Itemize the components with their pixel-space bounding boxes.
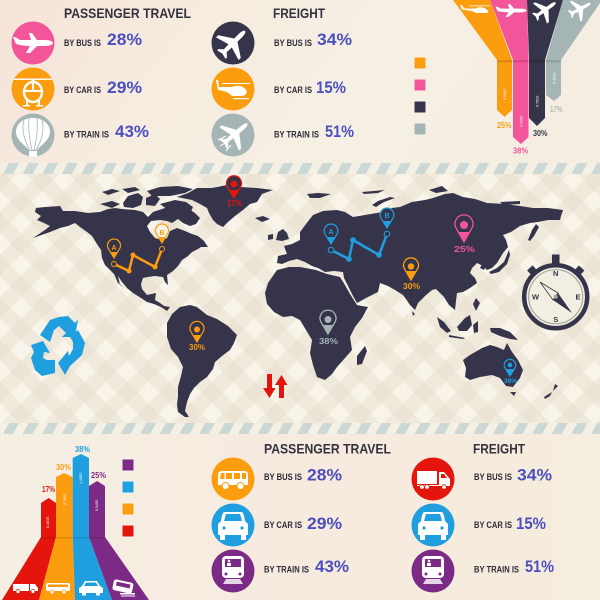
icon: plane in pink circle bbox=[12, 22, 54, 64]
pin: pink 25%: 25% bbox=[454, 244, 476, 254]
legend: top right squares bbox=[414, 57, 426, 135]
pin: orange asia 30% bbox=[403, 258, 420, 291]
bar: gray 17%: 17% bbox=[550, 104, 563, 114]
pin: red 17% bbox=[226, 176, 242, 208]
islands: arctic russia bbox=[307, 186, 520, 207]
pin: orange A: A bbox=[111, 245, 117, 252]
heading: freight: FREIGHT bbox=[273, 5, 325, 21]
pin: orange south america 30% bbox=[189, 321, 205, 352]
continent: africa bbox=[265, 267, 368, 380]
icon: compass: W bbox=[532, 292, 540, 302]
icon: recycle symbol bbox=[31, 316, 85, 376]
island: madagascar bbox=[357, 346, 367, 365]
icon: train on bar bbox=[112, 579, 135, 596]
heading: freight: FREIGHT bbox=[473, 440, 525, 456]
islands: canadian arctic bbox=[100, 186, 193, 214]
pin: orange A bbox=[107, 239, 121, 258]
panel: freight top bbox=[210, 5, 354, 156]
text: by train 43% bbox=[64, 122, 149, 141]
heading: passenger travel: PASSENGER TRAVEL bbox=[264, 440, 391, 456]
background: map plaid panel bbox=[0, 164, 600, 424]
bar: purple 25% bbox=[89, 470, 149, 600]
pin: blue australia 38%: 38% bbox=[504, 379, 518, 385]
islands: uk and ireland bbox=[268, 229, 289, 241]
bar: gray 17% bbox=[546, 0, 600, 114]
icon: train in purple circle bbox=[412, 550, 454, 592]
bar: red 17%: 0.463S bbox=[46, 516, 50, 528]
legend: bottom left squares bbox=[122, 459, 134, 537]
text: by train 43%: 43% bbox=[315, 557, 349, 576]
pin: orange B bbox=[156, 224, 168, 243]
pin: gray africa 38%: 38% bbox=[319, 336, 338, 346]
text: by bus 34%: 34% bbox=[317, 30, 352, 49]
text: by train 43%: 43% bbox=[115, 122, 149, 141]
text: by car 29%: 29% bbox=[307, 514, 342, 533]
world map bbox=[33, 185, 563, 417]
text: by train 43%: BY TRAIN IS bbox=[264, 564, 309, 574]
panel: passenger travel top bbox=[12, 5, 191, 156]
route: eurasia bbox=[328, 231, 390, 262]
text: by bus 34% bbox=[474, 466, 552, 484]
background: bottom band bbox=[0, 423, 600, 600]
bar: dark 30%: 30% bbox=[533, 128, 548, 138]
pin: blue B bbox=[380, 208, 394, 228]
icon: balloon in gray circle bbox=[12, 114, 54, 156]
text: by train 51%: 51% bbox=[325, 122, 354, 141]
icon: plane in dark circle bbox=[210, 20, 256, 66]
pin: blue A bbox=[324, 224, 338, 244]
icon: gray jet on funnel bbox=[565, 0, 596, 24]
text: by bus 34% bbox=[274, 30, 352, 49]
icon: truck in red circle bbox=[412, 458, 454, 500]
route: north america bbox=[112, 246, 164, 274]
icon: bus on bar bbox=[46, 583, 70, 594]
continent: greenland bbox=[177, 185, 273, 227]
icon: jet in gray circle bbox=[212, 112, 257, 156]
icon: plane on funnel bbox=[495, 4, 527, 17]
background: top band bbox=[0, 0, 600, 164]
islands: japan and sakhalin bbox=[480, 224, 539, 274]
bar: orange 25% bbox=[453, 0, 512, 130]
text: by bus 34%: BY BUS IS bbox=[474, 472, 512, 482]
heading: passenger travel: PASSENGER TRAVEL bbox=[64, 5, 191, 21]
bar: orange 30%: 0.762S bbox=[63, 493, 67, 505]
text: by bus 28% bbox=[264, 466, 342, 484]
text: by train 51%: 51% bbox=[525, 557, 554, 576]
islands: southeast asia bbox=[412, 298, 518, 340]
bar: pink 38% bbox=[490, 0, 528, 156]
continent: eurasia bbox=[277, 193, 563, 310]
bar: red 17% bbox=[2, 484, 56, 600]
icon: helicopter in orange circle bbox=[12, 68, 54, 110]
pin: orange south america 30%: 30% bbox=[189, 342, 205, 352]
icon: red up and down arrows bbox=[263, 374, 288, 398]
bar: purple 25%: 25% bbox=[91, 470, 106, 480]
island: iceland bbox=[255, 216, 270, 222]
pin: gray africa 38% bbox=[319, 310, 338, 346]
panel: freight bottom bbox=[412, 440, 554, 592]
pin: orange B: B bbox=[159, 230, 165, 237]
text: by car 15% bbox=[474, 514, 546, 533]
bar: blue 38%: 1.465S bbox=[79, 472, 83, 484]
bar: pink 38%: 38% bbox=[513, 146, 528, 156]
bar: pink 38%: 1.465S bbox=[520, 115, 524, 127]
bar: orange 30%: 30% bbox=[56, 462, 71, 472]
pin: pink 25% bbox=[454, 215, 476, 254]
panel: passenger travel bottom bbox=[212, 440, 391, 592]
bar: orange 30% bbox=[39, 462, 75, 600]
text: by car 29%: BY CAR IS bbox=[64, 85, 101, 95]
text: by car 29% bbox=[264, 514, 342, 533]
bar: dark 30%: 0.762S bbox=[536, 95, 540, 107]
pin: orange asia 30%: 30% bbox=[403, 281, 420, 291]
text: by train 43% bbox=[264, 557, 349, 576]
text: by car 29%: BY CAR IS bbox=[264, 520, 302, 530]
text: by car 15%: BY CAR IS bbox=[474, 520, 512, 530]
icon: side helicopter in orange circle bbox=[212, 68, 254, 110]
text: by bus 28% bbox=[64, 30, 142, 49]
bar: gray 17%: 0.463S bbox=[552, 72, 556, 84]
text: by bus 34%: 34% bbox=[517, 466, 552, 484]
chart: rising bars bottom left bbox=[2, 444, 149, 600]
pin: blue A: A bbox=[328, 229, 334, 236]
icon: compass: N bbox=[553, 269, 558, 278]
text: by bus 28%: BY BUS IS bbox=[264, 472, 302, 482]
text: by bus 28%: 28% bbox=[307, 466, 342, 484]
text: by car 15%: 15% bbox=[316, 78, 346, 97]
text: by car 29%: 29% bbox=[107, 78, 142, 97]
continent: australia bbox=[463, 343, 523, 387]
text: by car 15%: 15% bbox=[516, 514, 546, 533]
icon: compass: S bbox=[553, 315, 558, 324]
text: by car 15%: BY CAR IS bbox=[274, 85, 312, 95]
bar: blue 38%: 38% bbox=[75, 444, 90, 454]
icon: jet on funnel bbox=[528, 0, 563, 27]
text: by train 43%: BY TRAIN IS bbox=[64, 130, 109, 140]
text: by train 51%: BY TRAIN IS bbox=[274, 130, 319, 140]
continent: south america bbox=[167, 305, 237, 417]
text: by car 29% bbox=[64, 78, 142, 97]
bar: dark 30% bbox=[527, 0, 563, 138]
text: by bus 28%: BY BUS IS bbox=[64, 38, 101, 48]
pin: blue australia 38% bbox=[504, 359, 518, 385]
pin: blue B: B bbox=[384, 213, 390, 220]
bar: blue 38% bbox=[73, 444, 112, 600]
icon: car in blue circle bbox=[412, 504, 454, 546]
icon: car on bar bbox=[79, 581, 103, 596]
bar: purple 25%: 0.540S bbox=[95, 499, 99, 511]
icon: compass bbox=[524, 254, 587, 328]
bar: red 17%: 17% bbox=[42, 484, 55, 494]
text: by train 51% bbox=[274, 122, 354, 141]
continent: north america bbox=[33, 206, 208, 311]
icon: compass: E bbox=[575, 292, 581, 302]
text: by bus 34%: BY BUS IS bbox=[274, 38, 312, 48]
text: by bus 28%: 28% bbox=[107, 30, 142, 49]
pin: red 17%: 17% bbox=[227, 198, 242, 208]
icon: truck on bar bbox=[13, 584, 38, 594]
icon: helicopter on funnel bbox=[460, 5, 490, 13]
text: by train 51%: BY TRAIN IS bbox=[474, 564, 519, 574]
chart: funnel bars top right bbox=[453, 0, 600, 155]
icon: car in blue circle bbox=[212, 504, 254, 546]
bar: orange 25%: 0.540S bbox=[503, 88, 507, 100]
bar: orange 25%: 25% bbox=[497, 120, 512, 130]
icon: bus in orange circle bbox=[212, 458, 254, 500]
text: by train 51% bbox=[474, 557, 554, 576]
islands: tasmania and new zealand bbox=[510, 384, 558, 399]
icon: train in purple circle bbox=[212, 550, 254, 592]
text: by car 15% bbox=[274, 78, 346, 97]
